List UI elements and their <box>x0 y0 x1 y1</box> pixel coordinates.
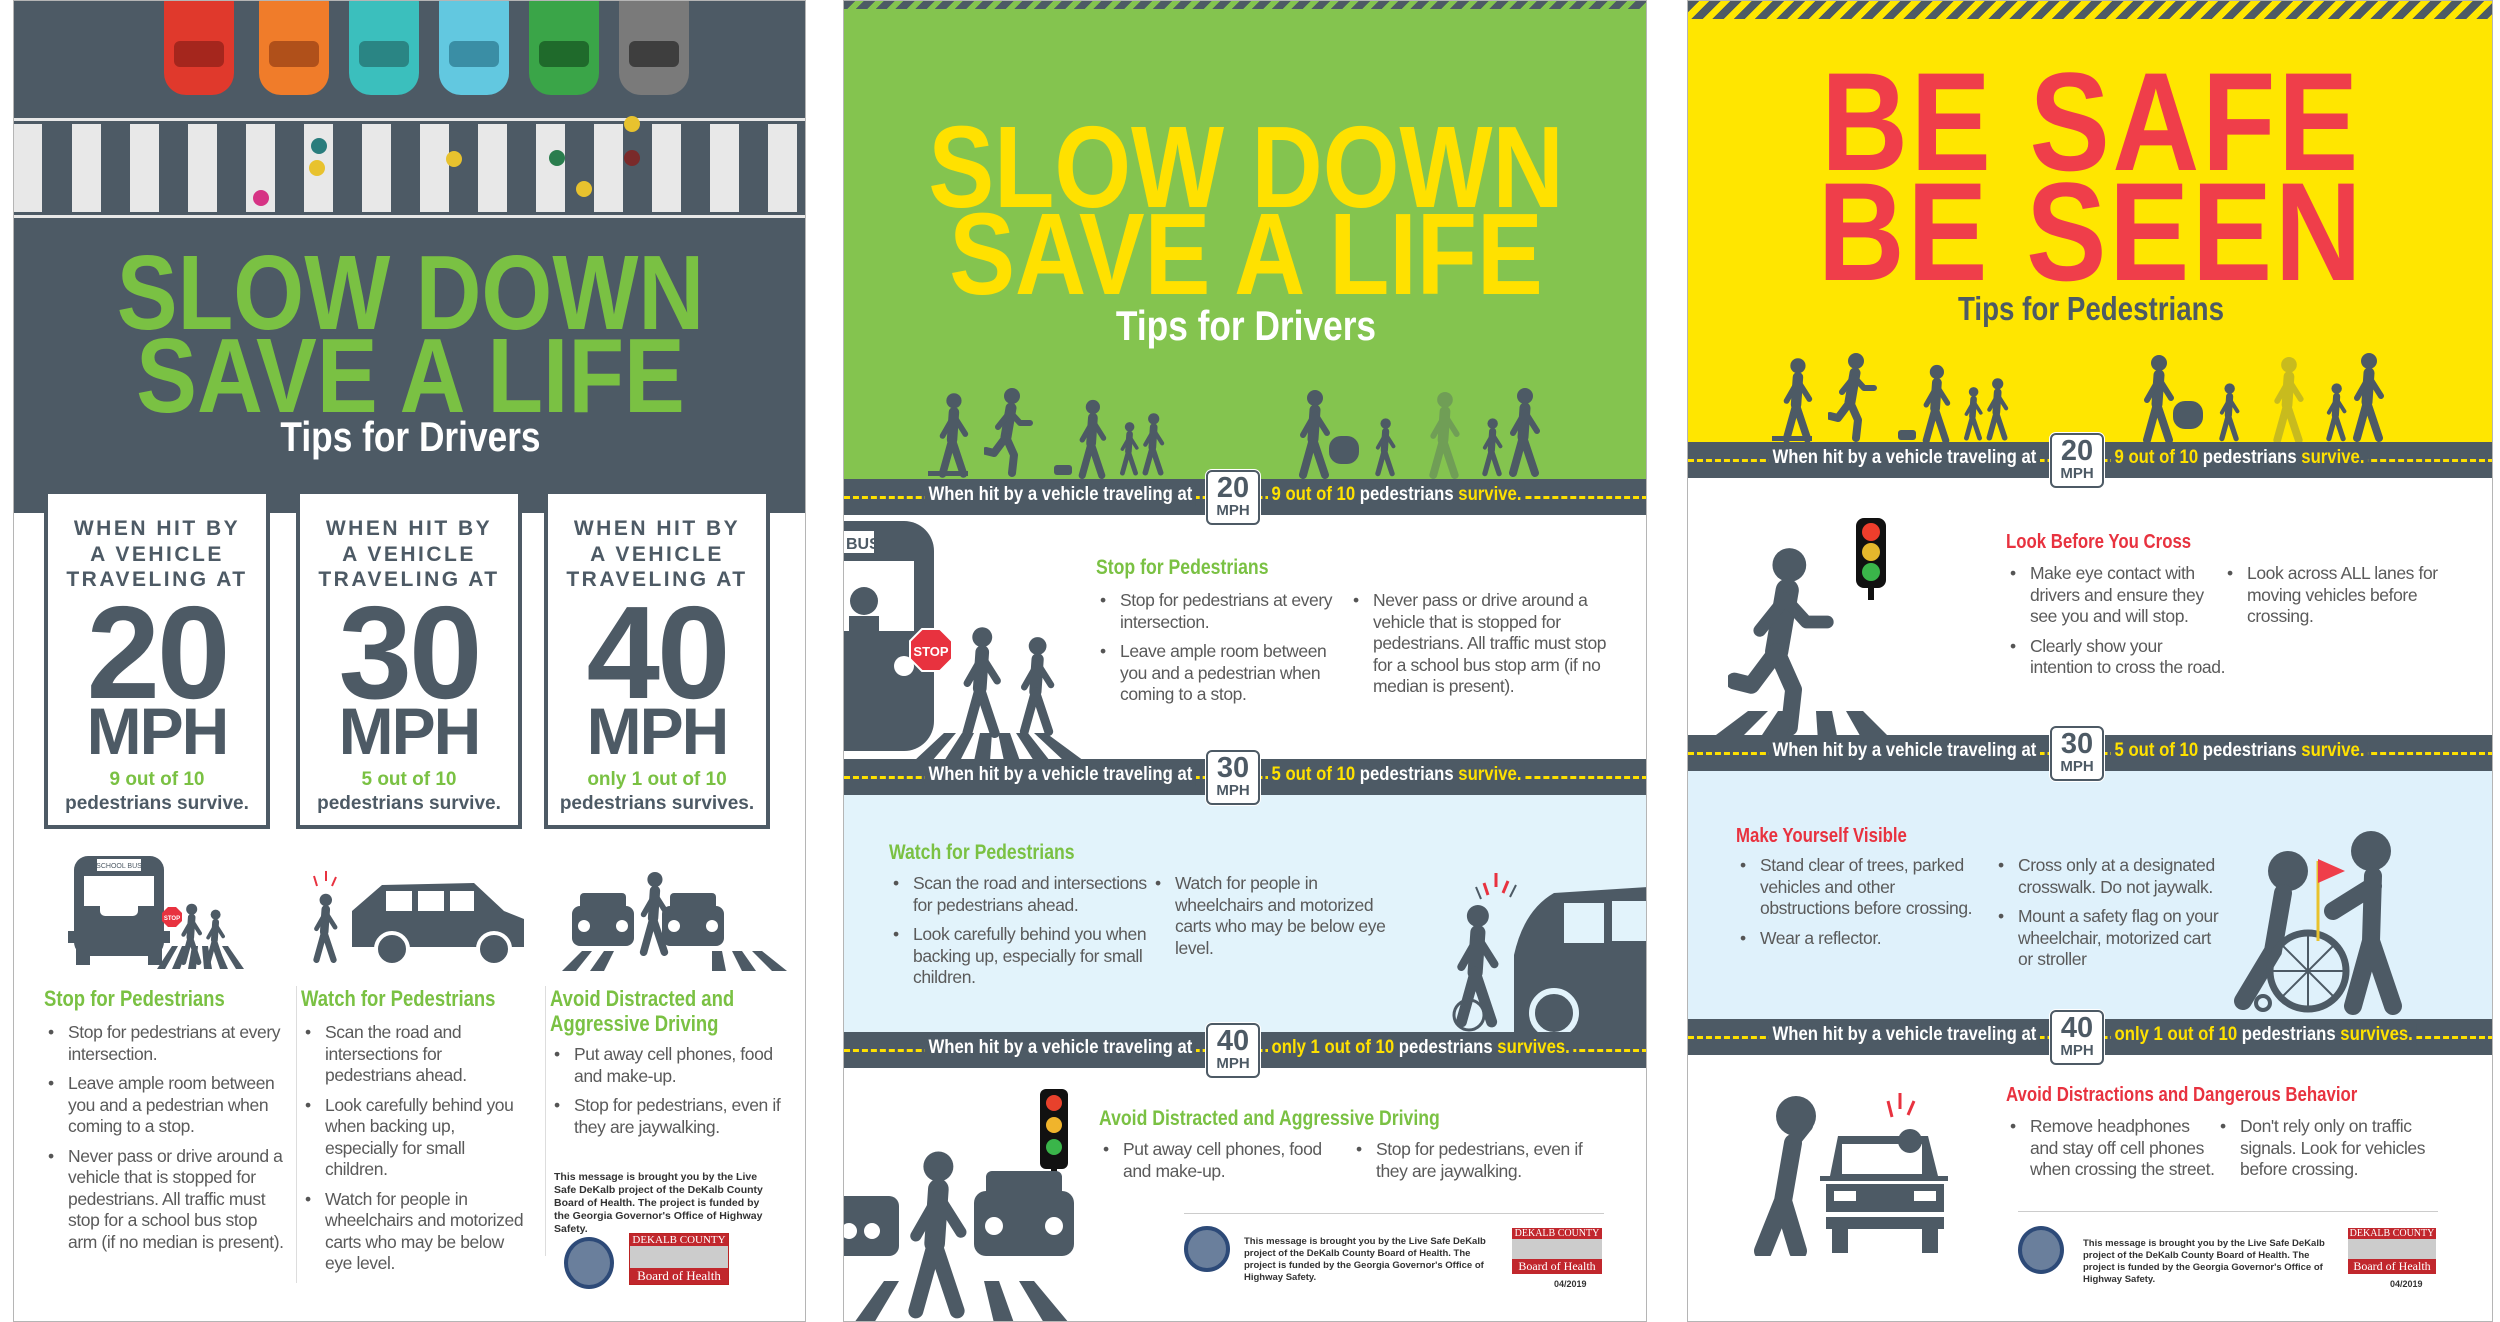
speed band 40 mph <box>1688 1019 2494 1055</box>
stat box 40 mph: 40 <box>587 578 727 726</box>
column: stop for pedestrians: Leave ample room between you and a pedestrian when coming to a stop. <box>68 1073 274 1136</box>
speed band 40 mph: MPH <box>2060 1042 2094 1059</box>
poster 2: slow down save a life (green): Put away cell phones, food and make-up. <box>1123 1139 1322 1180</box>
illustration: traffic light <box>1040 1089 1068 1172</box>
stat box 20 mph: TRAVELING AT <box>66 568 248 591</box>
icon: school bus with children: STOP <box>164 916 180 922</box>
footer credit text: This message is brought you by the Live Safe DeKalb project of the DeKalb County Board of Health. The project is funded by the Georgia Governor's Office of Highway Safety. <box>554 1171 763 1235</box>
footer <box>1184 1213 1604 1303</box>
speed band 40 mph: only 1 out of 10 pedestrians survives. <box>2115 1024 2413 1045</box>
poster 2: slow down save a life (green): Never pass or drive around a vehicle that is stopped for pedestrians. All traffic must stop for a school bus stop arm (if no median is present). <box>1373 590 1606 696</box>
stat box 20 mph: WHEN HIT BY <box>74 517 240 540</box>
stat box 30 mph: TRAVELING AT <box>318 568 500 591</box>
illustration: school bus and children <box>844 521 1082 759</box>
footer: DEKALB COUNTY <box>1515 1228 1599 1239</box>
footer <box>2018 1211 2438 1301</box>
icon: pedestrian between cars <box>562 872 787 971</box>
poster 2: slow down save a life (green): Stop for pedestrians, even if they are jaywalking. <box>1376 1139 1582 1180</box>
people silhouettes <box>1772 353 2384 442</box>
title: BE SAFE <box>1821 43 2361 200</box>
column: watch for pedestrians <box>296 986 531 1282</box>
icon: school bus with children <box>68 856 244 969</box>
stat box 40 mph: A VEHICLE <box>590 542 724 566</box>
stat box 30 mph: pedestrians survive. <box>317 792 501 814</box>
footer: 04/2019 <box>2390 1279 2423 1289</box>
column: avoid distracted driving: Put away cell phones, food and make-up. <box>574 1044 773 1086</box>
speed band 20 mph: MPH <box>1216 502 1250 519</box>
title: Tips for Drivers <box>1116 302 1376 349</box>
footer: Board of Health <box>1518 1259 1596 1273</box>
stat box 20 mph: MPH <box>87 694 227 768</box>
title <box>1818 43 2364 327</box>
title <box>928 102 1564 349</box>
column: watch for pedestrians: Look carefully behind you when backing up, especially for small children. <box>325 1094 513 1179</box>
section: stop for pedestrians <box>1096 556 1606 704</box>
stat box 30 mph: 5 out of 10 <box>361 768 456 790</box>
light blue section <box>844 795 1648 1033</box>
speed band 20 mph <box>1688 442 2494 478</box>
section: avoid distracted and aggressive driving: Avoid Distracted and Aggressive Driving <box>1099 1107 1440 1130</box>
column: stop for pedestrians: Stop for Pedestrians <box>44 986 225 1011</box>
illustration: distracted pedestrian and car <box>1754 1093 1948 1256</box>
section: avoid distracted and aggressive driving <box>1099 1107 1583 1180</box>
stat box 20 mph: A VEHICLE <box>90 542 224 566</box>
section: watch for pedestrians <box>889 841 1386 987</box>
title: BE SEEN <box>1818 153 2364 310</box>
section: watch for pedestrians: Watch for Pedestrians <box>889 841 1075 864</box>
poster 3: be safe be seen (yellow): Look across ALL lanes for moving vehicles before crossing. <box>2247 563 2438 626</box>
light blue section: Stand clear of trees, parked vehicles and other obstructions before crossing. <box>1760 855 1972 918</box>
illustration: school bus and children: BUS <box>846 536 880 553</box>
title: SAVE A LIFE <box>949 189 1543 319</box>
speed band 20 mph: When hit by a vehicle traveling at <box>1773 447 2036 468</box>
column: watch for pedestrians: Watch for people in wheelchairs and motorized carts who may be below eye level. <box>325 1188 523 1273</box>
column: stop for pedestrians: Never pass or drive around a vehicle that is stopped for pedestrians. All traffic must stop for a school bus stop arm (if no median is present). <box>68 1146 284 1252</box>
poster 2: slow down save a life (green): Stop for pedestrians at every intersection. <box>1120 590 1332 632</box>
stat box 40 mph: WHEN HIT BY <box>574 517 740 540</box>
speed band 30 mph: 5 out of 10 pedestrians survive. <box>1272 764 1521 785</box>
speed band 40 mph: MPH <box>1216 1055 1250 1072</box>
crosswalk <box>14 116 805 218</box>
people silhouettes <box>928 388 1540 479</box>
column: avoid distracted driving: Stop for pedestrians, even if they are jaywalking. <box>574 1095 780 1136</box>
speed band 40 mph: When hit by a vehicle traveling at <box>929 1037 1192 1058</box>
section: look before you cross: Look Before You Cross <box>2006 531 2191 553</box>
speed band 40 mph <box>844 1032 1648 1068</box>
logos <box>564 1233 729 1289</box>
column: stop for pedestrians <box>44 986 284 1252</box>
stat box 40 mph: pedestrians survives. <box>560 792 754 814</box>
section: avoid distractions <box>2006 1084 2425 1179</box>
stat box 30 mph <box>296 490 522 829</box>
stat box 40 mph: only 1 out of 10 <box>587 768 727 790</box>
stat box 40 mph: TRAVELING AT <box>566 568 748 591</box>
poster 3: be safe be seen (yellow) <box>1687 0 2493 1322</box>
speed band 30 mph: When hit by a vehicle traveling at <box>1773 740 2036 761</box>
light blue section: Watch for people in wheelchairs and motorized carts who may be below eye level. <box>1175 873 1385 958</box>
title: SLOW DOWN <box>117 234 704 352</box>
title <box>117 234 704 460</box>
column: avoid distracted driving: Aggressive Driving <box>550 1011 718 1036</box>
section: look before you cross <box>2006 531 2438 677</box>
poster 2: slow down save a life (green): Leave ample room between you and a pedestrian when coming to a stop. <box>1120 641 1326 704</box>
illustration: pedestrian between cars <box>844 1152 1074 1321</box>
footer: This message is brought you by the Live Safe DeKalb project of the DeKalb County Board of Health. The project is funded by the Georgia Governor's Office of Highway Safety. <box>2083 1238 2325 1285</box>
yellow header <box>1688 1 2494 446</box>
icon: school bus with children: SCHOOL BUS <box>96 863 142 870</box>
speed band 40 mph: 40 <box>2061 1012 2093 1044</box>
speed band 30 mph: MPH <box>1216 782 1250 799</box>
speed band 20 mph: 9 out of 10 pedestrians survive. <box>2115 447 2364 468</box>
stat box 20 mph: 20 <box>87 578 227 726</box>
footer: Board of Health <box>2353 1259 2431 1273</box>
light blue section: Mount a safety flag on your wheelchair, motorized cart or stroller <box>2018 906 2218 969</box>
speed band 30 mph <box>1688 735 2494 771</box>
stat box 30 mph: MPH <box>339 694 479 768</box>
column: stop for pedestrians: Stop for pedestrians at every intersection. <box>68 1022 280 1064</box>
title: Tips for Pedestrians <box>1958 290 2224 327</box>
footer: This message is brought you by the Live Safe DeKalb project of the DeKalb County Board of Health. The project is funded by the Georgia Governor's Office of Highway Safety. <box>1244 1236 1486 1283</box>
speed band 30 mph: 30 <box>1217 752 1249 784</box>
light blue section: Scan the road and intersections for pedestrians ahead. <box>913 873 1147 914</box>
title: SAVE A LIFE <box>136 317 685 435</box>
stat box 20 mph: 9 out of 10 <box>109 768 204 790</box>
speed band 40 mph: only 1 out of 10 pedestrians survives. <box>1272 1037 1570 1058</box>
stat box 30 mph: WHEN HIT BY <box>326 517 492 540</box>
green header <box>844 1 1648 481</box>
light blue section: Wear a reflector. <box>1760 928 1881 948</box>
cars row <box>164 1 689 95</box>
column: avoid distracted driving: Avoid Distracted and <box>550 986 734 1011</box>
column: watch for pedestrians: Watch for Pedestrians <box>301 986 495 1011</box>
speed band 20 mph: When hit by a vehicle traveling at <box>929 484 1192 505</box>
logos: Board of Health <box>637 1268 721 1283</box>
column: watch for pedestrians: Scan the road and intersections for pedestrians ahead. <box>325 1022 467 1085</box>
speed band 30 mph <box>844 759 1648 795</box>
illustration: cyclist and car <box>1452 873 1646 1032</box>
speed band 40 mph: When hit by a vehicle traveling at <box>1773 1024 2036 1045</box>
stat box 30 mph: 30 <box>339 578 479 726</box>
poster 3: be safe be seen (yellow): Clearly show your intention to cross the road. <box>2030 636 2225 677</box>
section: make yourself visible <box>1736 825 2218 969</box>
poster 2: slow down save a life (green) <box>843 0 1647 1322</box>
light blue section <box>1688 771 2494 1021</box>
footer: 04/2019 <box>1554 1279 1587 1289</box>
speed band 20 mph: 20 <box>1217 472 1249 504</box>
speed band 20 mph: 9 out of 10 pedestrians survive. <box>1272 484 1521 505</box>
light blue section: Look carefully behind you when backing up, especially for small children. <box>913 924 1146 987</box>
speed band 40 mph: 40 <box>1217 1025 1249 1057</box>
section: avoid distractions: Avoid Distractions and Dangerous Behavior <box>2006 1084 2357 1106</box>
speed band 30 mph: 30 <box>2061 728 2093 760</box>
poster 3: be safe be seen (yellow): Remove headphones and stay off cell phones when crossing the street. <box>2030 1116 2215 1179</box>
section: stop for pedestrians: Stop for Pedestrians <box>1096 556 1269 579</box>
poster 3: be safe be seen (yellow): Don't rely only on traffic signals. Look for vehicles before crossing. <box>2240 1116 2425 1179</box>
illustration: walking person and traffic light <box>1716 518 1887 735</box>
speed band 30 mph: MPH <box>2060 758 2094 775</box>
header background: road <box>14 1 807 513</box>
poster 3: be safe be seen (yellow): Make eye contact with drivers and ensure they see you and will stop. <box>2030 563 2204 626</box>
speed band 20 mph: MPH <box>2060 465 2094 482</box>
section: make yourself visible: Make Yourself Visible <box>1736 825 1907 847</box>
stat box 30 mph: A VEHICLE <box>342 542 476 566</box>
poster 1: slow down save a life (dark) <box>13 0 806 1322</box>
stat box 40 mph <box>544 490 770 829</box>
speed band 20 mph: 20 <box>2061 435 2093 467</box>
icon: car and cyclist <box>313 871 524 963</box>
logos: DEKALB COUNTY <box>632 1234 726 1246</box>
speed band 30 mph: 5 out of 10 pedestrians survive. <box>2115 740 2364 761</box>
stat box 20 mph <box>44 490 270 829</box>
stat box 20 mph: pedestrians survive. <box>65 792 249 814</box>
light blue section: Cross only at a designated crosswalk. Do not jaywalk. <box>2018 855 2215 896</box>
title: Tips for Drivers <box>280 413 541 460</box>
illustration: wheelchair with flag <box>2234 831 2402 1015</box>
title: SLOW DOWN <box>928 102 1564 232</box>
column: avoid distracted driving <box>545 986 790 1256</box>
footer: DEKALB COUNTY <box>2350 1228 2434 1239</box>
illustration: school bus and children: STOP <box>913 644 949 659</box>
speed band 30 mph: When hit by a vehicle traveling at <box>929 764 1192 785</box>
speed band 20 mph <box>844 479 1648 515</box>
stat box 40 mph: MPH <box>587 694 727 768</box>
